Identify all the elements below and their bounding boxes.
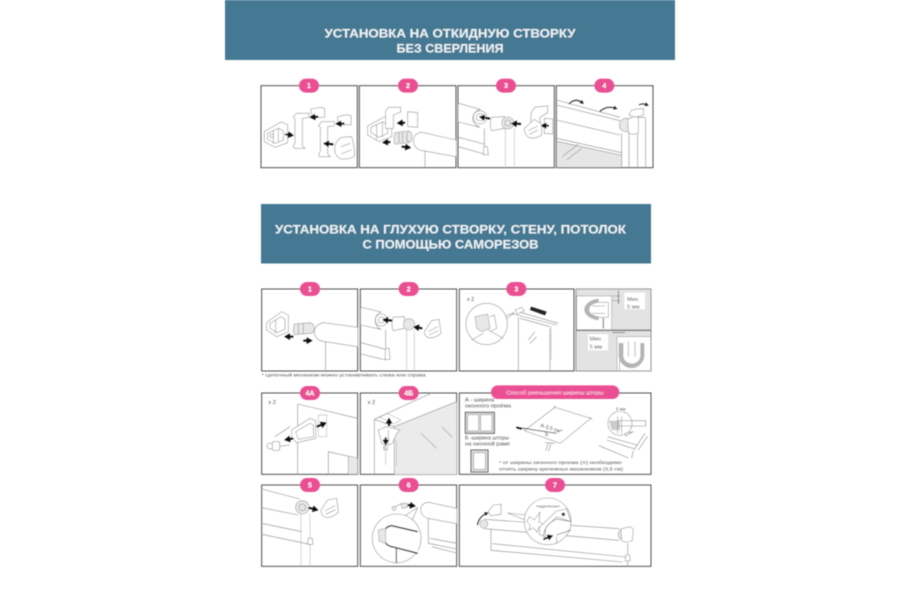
badge 3: 3 [514,286,518,293]
panel: width reduction method: отнять ширину крепежных механизмов (3,5 см) [499,467,623,473]
badge 4Б: 4Б [404,390,413,397]
pill heading [491,385,619,399]
panel: width reduction method [459,385,651,474]
panel: min clearance side: 5 мм [590,344,602,350]
panel: step 7 [459,478,651,566]
panel: min clearance top: Мин. [627,297,640,303]
panel: min clearance top: 5 мм [627,305,640,311]
footnote: * Цепочный механизм можно устанавливать слева или справа [262,372,426,379]
badge 2: 2 [407,286,411,293]
panel: step 4A [262,386,358,474]
panel: width reduction method: Б -ширина шторы [465,436,509,442]
banner: fixed sash, wall, ceiling installation: С ПОМОЩЬЮ САМОРЕЗОВ [362,238,538,252]
badge 1: 1 [307,83,311,90]
section: screw mount steps 1-3 [262,282,651,379]
panel: step 7: «щелчок» [536,503,561,508]
panel: step 3 [459,282,574,371]
banner: fixed sash, wall, ceiling installation: УСТАНОВКА НА ГЛУХУЮ СТВОРКУ, СТЕНУ, ПОТОЛОК [275,223,627,236]
blind with cut marks: А-3,5 см* [539,423,563,435]
panel: min clearance side [576,331,651,371]
window A diagram [465,412,494,433]
panel: width reduction method: на оконной раме [465,441,510,448]
panel: step 2 [359,79,456,168]
badge 3: 3 [504,83,508,90]
panel: step 3 [458,79,554,168]
section: tilt-sash steps 1-4 [261,79,653,168]
badge 2: 2 [406,83,410,90]
banner: fixed sash, wall, ceiling installation [261,204,651,264]
panel: step 4Б: x 2 [368,400,375,406]
panel: step 4Б [360,386,457,474]
section: steps 5-7 [262,478,651,566]
panel: step 5 [262,478,358,566]
section: steps 4A, 4Б and width reduction [262,385,651,474]
badge 5: 5 [308,482,312,489]
panel: step 1 [261,79,357,168]
panel: width reduction method: оконного проёма [465,404,512,410]
panel: width reduction method: А - ширина [465,398,495,404]
badge 7: 7 [553,482,557,489]
detail: 5 mm trimming [599,407,648,458]
blind with cut marks [516,405,592,451]
badge 6: 6 [407,482,411,489]
panel: step 3: x 2 [467,297,474,303]
panel: step 4 [556,79,653,168]
panel: step 6 [360,478,457,566]
window B diagram [471,450,488,472]
banner: tilt-sash installation: УСТАНОВКА НА ОТКИДНУЮ СТВОРКУ [324,28,576,41]
panel: step 1 [262,282,358,371]
badge 1: 1 [308,286,312,293]
badge 4: 4 [602,83,606,90]
panel: step 4A: x 2 [268,400,276,406]
banner: tilt-sash installation [225,0,675,60]
pill heading: Способ уменьшения ширины шторы [506,390,604,396]
badge 4A: 4А [306,390,314,397]
badge 7 [545,478,565,492]
panel: step 2 [360,282,457,371]
banner: tilt-sash installation: БЕЗ СВЕРЛЕНИЯ [396,42,504,55]
panel: min clearance top [576,289,651,330]
detail: 5 mm trimming: 5 мм [616,407,626,412]
panel: min clearance side: Мин. [590,336,603,342]
blind with cut marks: Б [545,432,549,438]
panel: width reduction method: * от ширины оконного проема (А) необходимо [499,460,622,466]
